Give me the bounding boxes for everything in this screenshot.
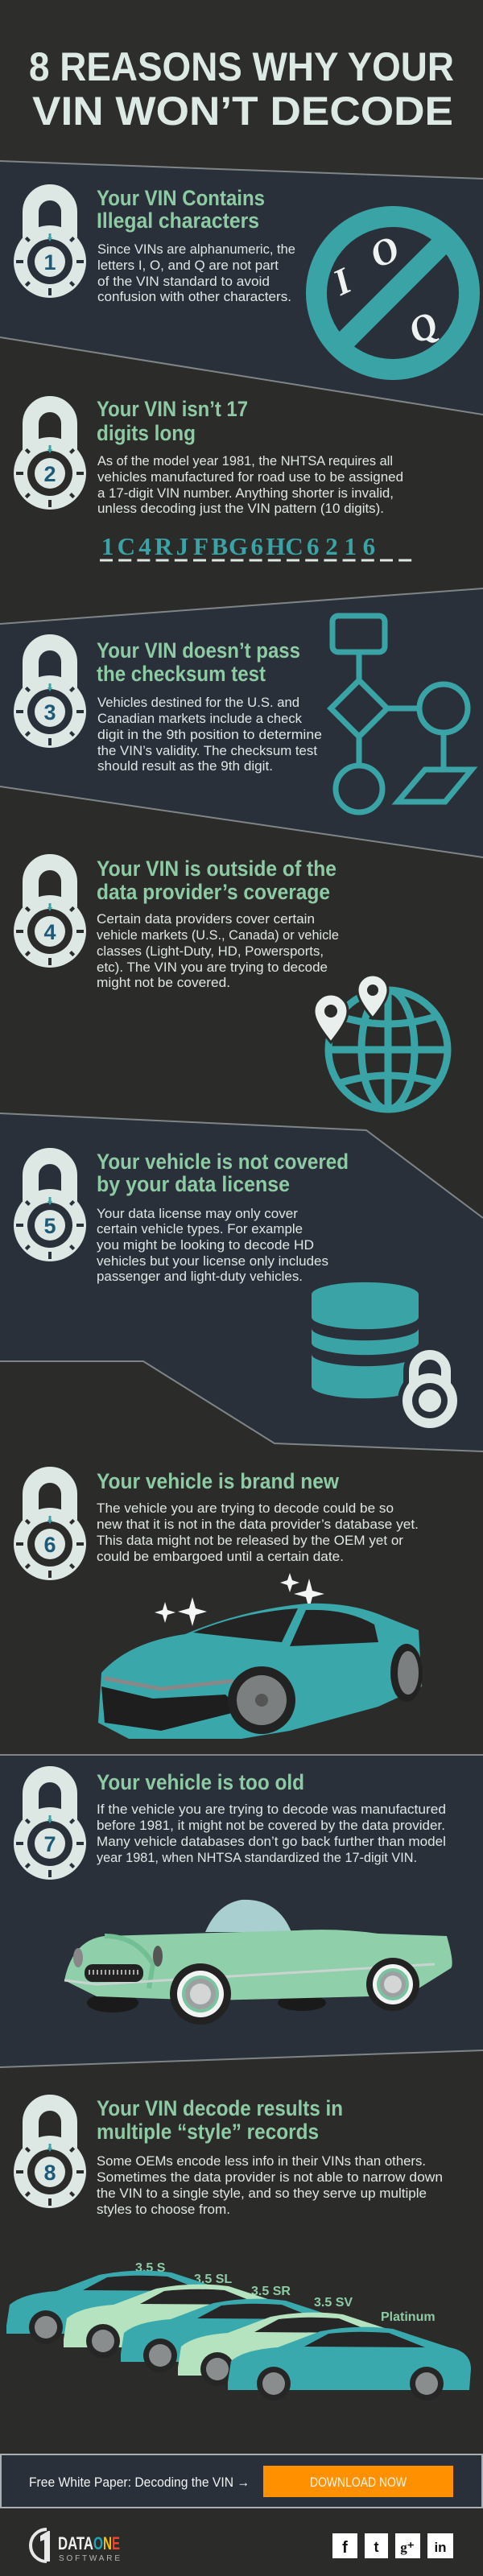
heading 2 xyxy=(97,397,248,445)
text 7: before 1981, it might not be covered by the data provider. xyxy=(97,1818,445,1833)
heading 8 xyxy=(97,2096,343,2144)
logo: DataOne Software: O xyxy=(93,2533,103,2553)
icon: padlock 4: 4 xyxy=(43,920,56,944)
panel 3: checksum xyxy=(14,616,472,812)
social icons: in xyxy=(434,2540,447,2555)
heading 1 xyxy=(97,186,265,233)
text 4: etc). The VIN you are trying to decode xyxy=(97,960,328,975)
panel 6: brand new xyxy=(14,1469,423,1739)
style labels xyxy=(135,2261,436,2324)
VIN example: 1C4RJFBG6HC6216 xyxy=(101,532,375,560)
icon: flowchart xyxy=(331,616,472,812)
heading 1: Your VIN Contains xyxy=(97,186,265,210)
text 7: Many vehicle databases don’t go back further than model xyxy=(97,1835,446,1849)
heading 4 xyxy=(97,857,336,904)
text 3 xyxy=(97,696,322,774)
panel 7: too old xyxy=(14,1770,452,2025)
text 5: passenger and light-duty vehicles. xyxy=(97,1269,303,1284)
text 2 xyxy=(97,454,403,516)
panel backgrounds xyxy=(0,161,483,2067)
text 5: certain vehicle types. For example xyxy=(97,1222,303,1236)
social icons xyxy=(332,2533,453,2558)
text 4: classes (Light-Duty, HD, Powersports, xyxy=(97,944,324,959)
icon: padlock 2: 2 xyxy=(43,462,56,486)
text 1: of the VIN standard to avoid xyxy=(97,275,270,289)
panel 5: license xyxy=(14,1150,462,1433)
logo: DataOne Software: E xyxy=(112,2533,120,2553)
style labels: 3.5 SR xyxy=(251,2285,291,2298)
text 4: Certain data providers cover certain xyxy=(97,912,315,927)
icon: padlock 2 xyxy=(14,404,86,510)
icon: padlock 5: 5 xyxy=(43,1214,56,1238)
text 2: unless decoding just the VIN pattern (10 digits). xyxy=(97,502,384,516)
text 6: could be embargoed until a certain date. xyxy=(97,1550,344,1564)
text 8 xyxy=(97,2154,443,2217)
heading 5 xyxy=(97,1150,349,1196)
icon: padlock 4 xyxy=(14,862,86,968)
panel 8: multiple styles xyxy=(6,2096,471,2401)
text 4: vehicle markets (U.S., Canada) or vehicle xyxy=(97,928,339,943)
icon: padlock 8 xyxy=(14,2103,86,2208)
icon: padlock 6 xyxy=(14,1475,86,1580)
text 3: the VIN’s validity. The checksum test xyxy=(97,744,317,758)
style labels: 3.5 S xyxy=(135,2261,166,2275)
title: VIN WON’T DECODE xyxy=(32,89,453,134)
icon: padlock 8: 8 xyxy=(43,2161,56,2185)
download button xyxy=(263,2466,453,2497)
text 2: As of the model year 1981, the NHTSA requires all xyxy=(97,454,393,469)
icon: padlock 6: 6 xyxy=(43,1533,56,1557)
text 6: This data might not be released by the OEM yet or xyxy=(97,1534,404,1548)
text 4: might not be covered. xyxy=(97,976,230,990)
logo: DataOne Software: DATA xyxy=(58,2533,93,2553)
panel 1: illegal characters xyxy=(14,186,469,369)
icon: padlock 5 xyxy=(14,1156,86,1261)
text 1: Since VINs are alphanumeric, the xyxy=(97,242,295,257)
text 8: Sometimes the data provider is not able to narrow down xyxy=(97,2170,443,2185)
text 3: digit in the 9th position to determine xyxy=(97,728,322,742)
logo: DataOne Software xyxy=(31,2529,120,2563)
heading 4: Your VIN is outside of the xyxy=(97,857,336,881)
text 8: styles to choose from. xyxy=(97,2202,230,2217)
icon: no I O Q xyxy=(316,217,469,369)
icon: padlock 1: 1 xyxy=(43,250,56,275)
heading 5: Your vehicle is not covered xyxy=(97,1150,349,1174)
icon: no I O Q: O xyxy=(364,227,406,276)
heading 2: Your VIN isn’t 17 xyxy=(97,397,248,421)
panel 4: coverage xyxy=(14,857,448,1109)
heading 8: Your VIN decode results in xyxy=(97,2096,343,2120)
title xyxy=(29,44,454,134)
text 6: The vehicle you are trying to decode could be so xyxy=(97,1501,394,1516)
style labels: Platinum xyxy=(381,2310,436,2324)
icon: globe with pins xyxy=(314,975,448,1109)
social icons: f xyxy=(342,2539,348,2557)
heading 3: the checksum test xyxy=(97,662,266,686)
icon: no I O Q: I xyxy=(326,259,359,303)
social icons: t xyxy=(374,2539,378,2555)
icon: padlock 3: 3 xyxy=(43,700,56,724)
heading 4: data provider’s coverage xyxy=(97,880,330,904)
heading 3: Your VIN doesn’t pass xyxy=(97,638,300,663)
text 4 xyxy=(97,912,339,990)
heading 3 xyxy=(97,638,300,686)
panel 2: 17 digits xyxy=(14,397,416,560)
icon: database with lock xyxy=(312,1282,462,1433)
heading 6: Your vehicle is brand new xyxy=(97,1469,340,1493)
text 1 xyxy=(97,242,295,304)
illustration: sports car with sparkles xyxy=(98,1573,423,1739)
text 5: Your data license may only cover xyxy=(97,1207,299,1221)
social icons: g⁺ xyxy=(400,2540,415,2555)
text 5: you might be looking to decode HD xyxy=(97,1238,314,1253)
heading 1: Illegal characters xyxy=(97,208,259,233)
title: 8 REASONS WHY YOUR xyxy=(29,44,454,89)
icon: padlock 3 xyxy=(14,642,86,748)
text 3: Canadian markets include a check xyxy=(97,712,303,726)
text 1: confusion with other characters. xyxy=(97,290,291,304)
logo: DataOne Software: N xyxy=(103,2533,112,2553)
text 1: letters I, O, and Q are not part xyxy=(97,258,279,273)
illustration: classic convertible xyxy=(64,1900,452,2025)
logo: DataOne Software: SOFTWARE xyxy=(59,2554,120,2563)
CTA bar xyxy=(1,2454,482,2508)
style labels: 3.5 SV xyxy=(314,2296,353,2310)
icon: padlock 7 xyxy=(14,1774,86,1880)
text 7: If the vehicle you are trying to decode was manufactured xyxy=(97,1802,446,1817)
text 8: the VIN to a single style, and so they serve up multiple xyxy=(97,2186,427,2201)
text 3: Vehicles destined for the U.S. and xyxy=(97,696,299,710)
icon: padlock 1 xyxy=(14,192,86,298)
text 7: year 1981, when NHTSA standardized the 17-digit VIN. xyxy=(97,1851,417,1865)
heading 2: digits long xyxy=(97,421,196,445)
text 5: vehicles but your license only includes xyxy=(97,1254,328,1269)
header band xyxy=(0,0,483,185)
style labels: 3.5 SL xyxy=(194,2273,232,2286)
download button: DOWNLOAD NOW xyxy=(310,2475,407,2490)
text 6: new that it is not in the data provider’s database yet. xyxy=(97,1517,419,1532)
text 2: a 17-digit VIN number. Anything shorter is invalid, xyxy=(97,486,394,501)
heading 8: multiple “style” records xyxy=(97,2120,319,2144)
icon: padlock 7: 7 xyxy=(43,1832,56,1856)
text 5 xyxy=(97,1207,328,1284)
text 3: should result as the 9th digit. xyxy=(97,759,273,774)
text 2: vehicles manufactured for road use to be assigned xyxy=(97,470,403,485)
heading 5: by your data license xyxy=(97,1172,290,1196)
CTA text: Free White Paper: Decoding the VIN → xyxy=(29,2475,250,2490)
text 6 xyxy=(97,1501,419,1564)
icon: no I O Q: Q xyxy=(402,303,444,352)
text 8: Some OEMs encode less info in their VINs than others. xyxy=(97,2154,426,2169)
text 7 xyxy=(97,1802,446,1865)
heading 7: Your vehicle is too old xyxy=(97,1770,304,1794)
illustration: five sedans xyxy=(6,2271,471,2401)
